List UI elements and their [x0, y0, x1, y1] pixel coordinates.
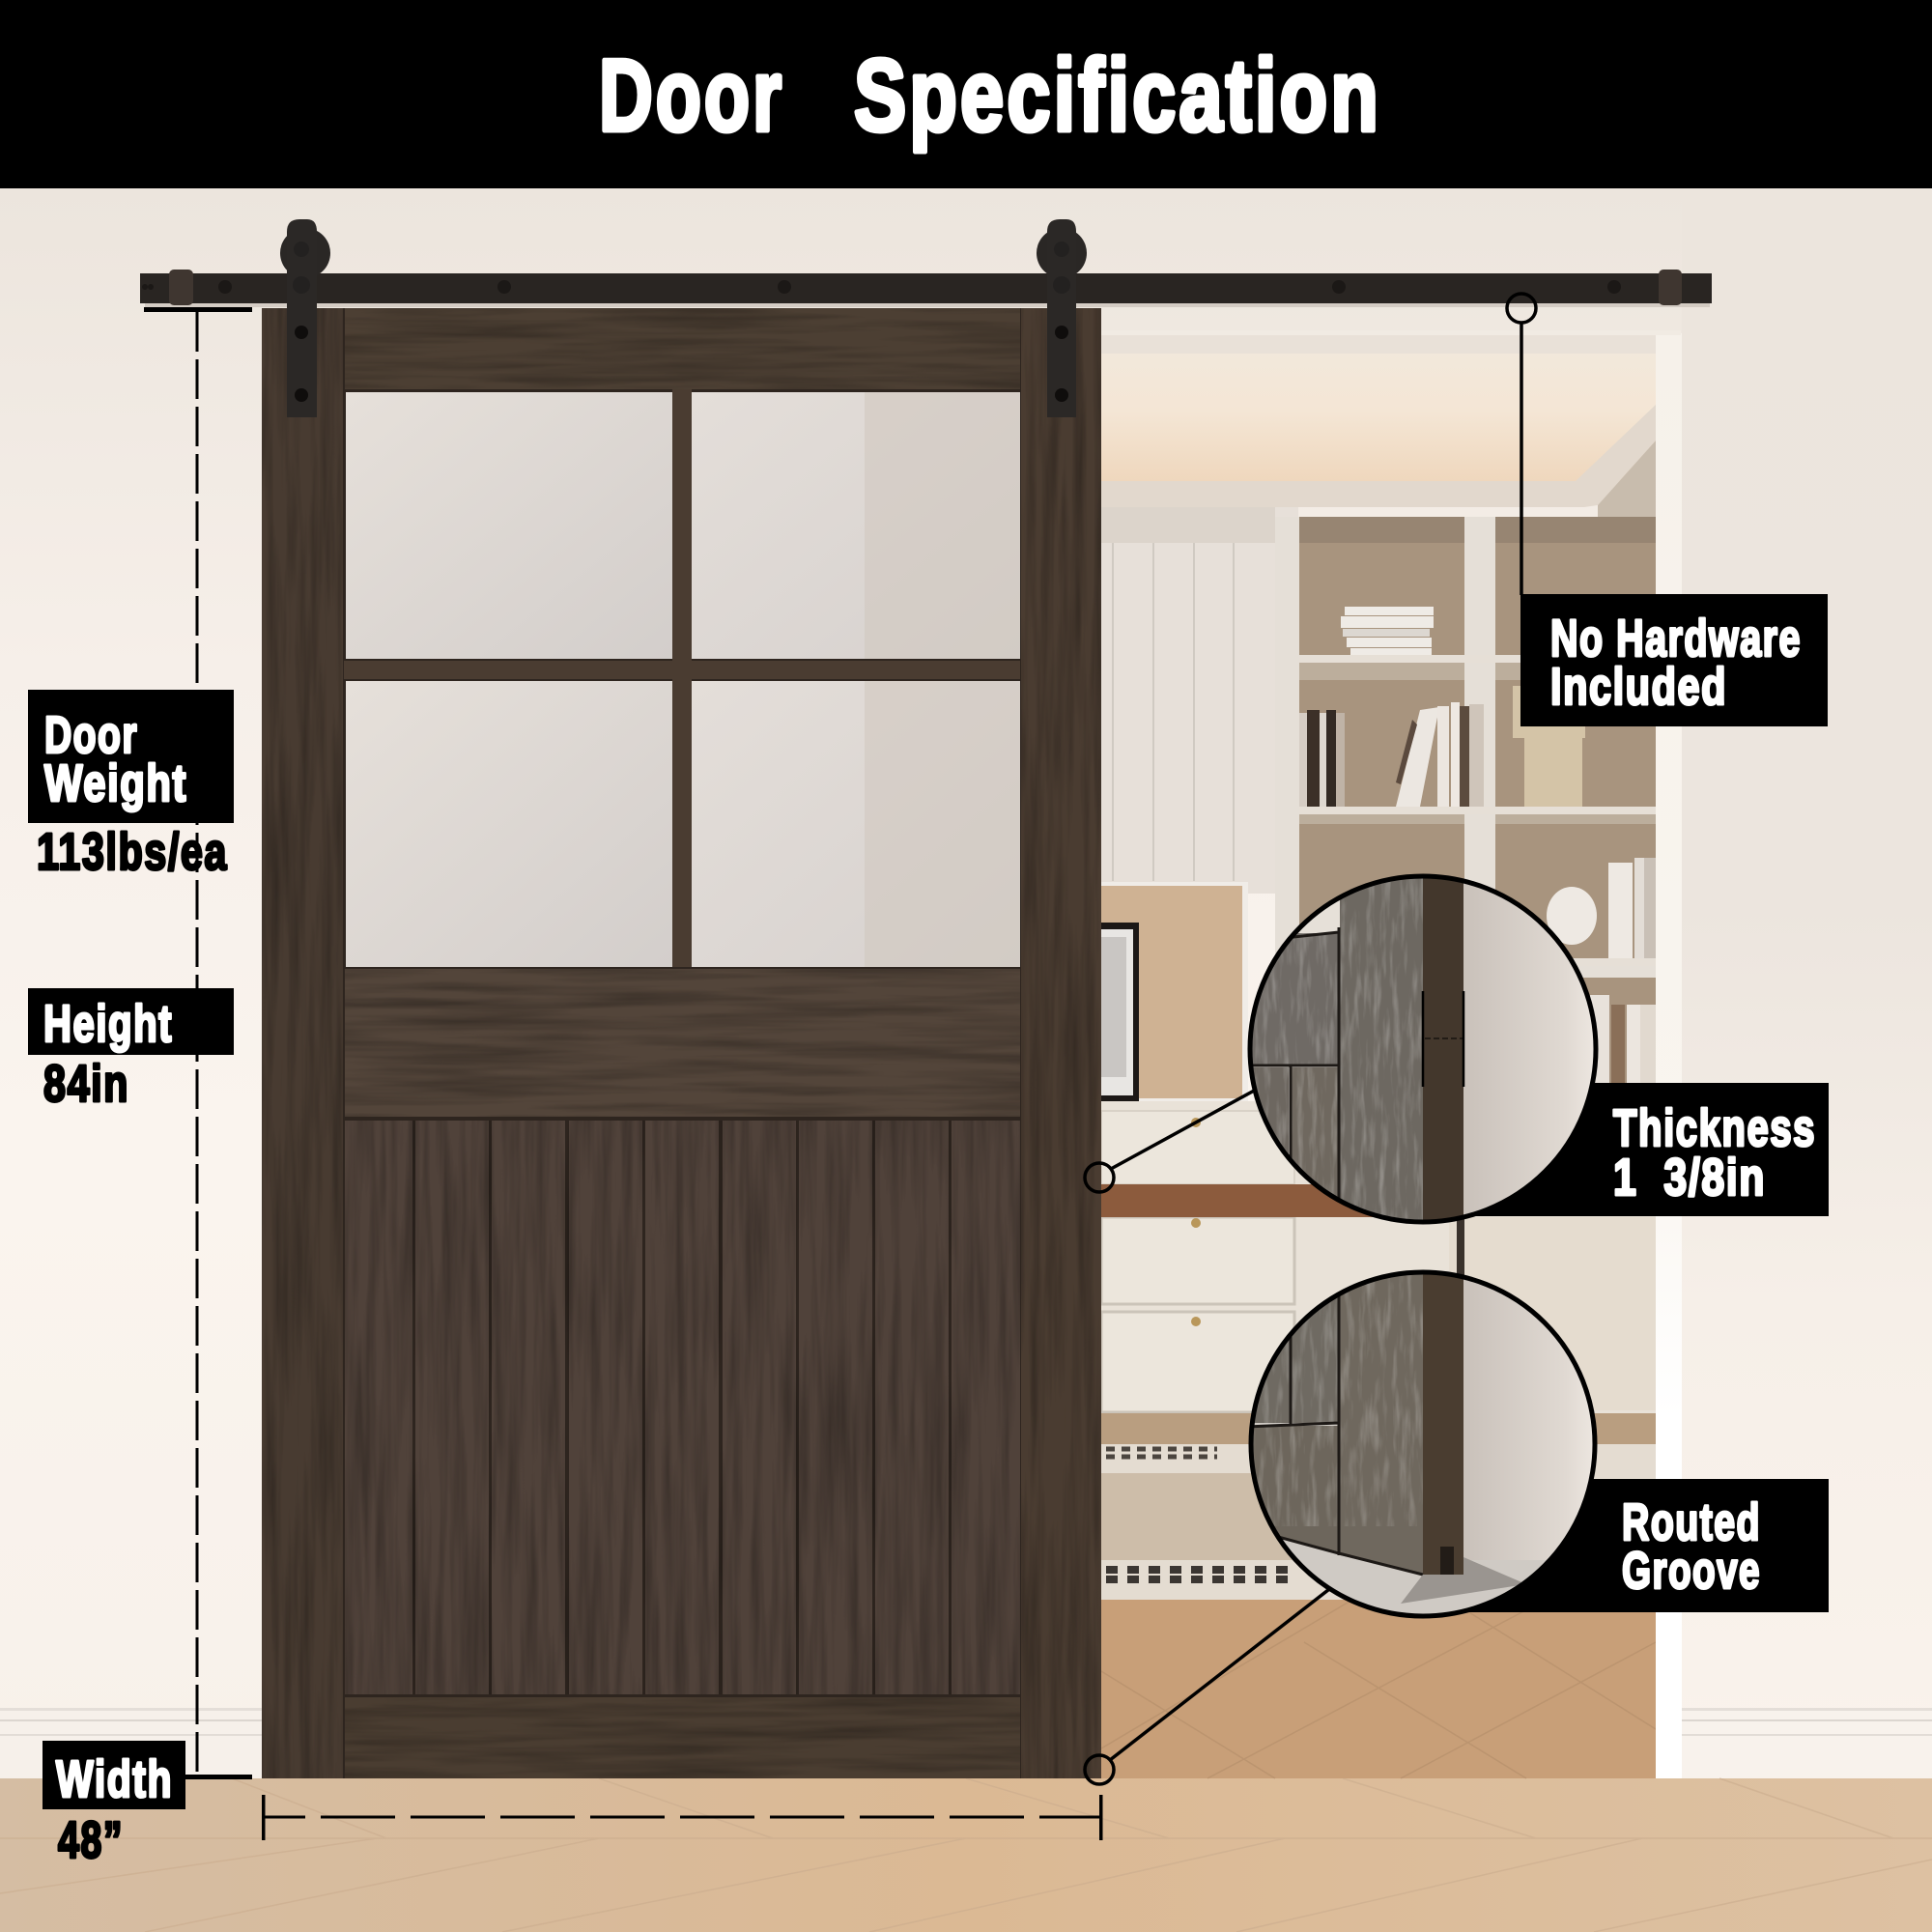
middle rail: [345, 969, 1020, 1117]
label: door weight: Weight: [44, 754, 187, 812]
vase and books on lower shelf: [1547, 858, 1656, 1169]
label: door weight: [28, 690, 234, 823]
sliding door: [262, 308, 1101, 1778]
panelled wall: [1101, 507, 1298, 894]
ceiling: [1101, 354, 1656, 481]
crown moulding: [1101, 404, 1657, 507]
label: no hardware included: No Hardware: [1550, 610, 1802, 668]
width dimension line: [262, 1795, 1103, 1840]
value: door weight: 113lbs/ea: [37, 823, 228, 881]
detail circle: thickness: [1246, 874, 1600, 1232]
glass pane bottom left: [346, 681, 672, 967]
rug: [1101, 1413, 1656, 1600]
title: [599, 39, 1381, 153]
top rail: [345, 308, 1020, 389]
callout line: routed groove: [1085, 1586, 1333, 1784]
shelf undersides: [1299, 517, 1656, 824]
soffit: [1101, 330, 1656, 354]
floor: [0, 1778, 1932, 1932]
label: no hardware included: Included: [1550, 658, 1727, 716]
glass pane top left: [346, 392, 672, 659]
label: width: [43, 1741, 185, 1809]
title: Door: [599, 39, 784, 153]
door base: [262, 308, 1101, 1778]
right hanger: [1037, 219, 1087, 417]
bookcase frame: [1275, 517, 1656, 1193]
door jamb: [1101, 330, 1682, 1778]
grain on stile: [1340, 874, 1423, 1227]
grain on door face: [1246, 1270, 1423, 1575]
label: door weight: Door: [44, 706, 138, 764]
art frame: [1101, 882, 1248, 1101]
barn door track: [140, 270, 1712, 307]
left stopper: [169, 270, 193, 305]
upright books left: [1299, 710, 1345, 807]
label: height: Height: [43, 995, 173, 1053]
right stopper: [1659, 270, 1682, 305]
label: thickness: [1449, 1083, 1829, 1216]
lamp on shelf: [1513, 686, 1585, 807]
label: no hardware included: [1520, 594, 1828, 726]
wood grain: [262, 308, 1101, 1778]
title: Specification: [854, 39, 1381, 153]
glass pane bottom right: [692, 681, 1020, 967]
label: width: Width: [56, 1750, 173, 1808]
glass pane top right: [692, 392, 1020, 659]
room floor: [1101, 1600, 1656, 1778]
label: routed groove: Groove: [1622, 1542, 1761, 1600]
callout line: thickness: [1085, 1090, 1256, 1192]
mullion horizontal: [344, 661, 1020, 679]
label: routed groove: [1449, 1479, 1829, 1612]
label: thickness: 1 3/8in: [1613, 1149, 1766, 1207]
book stack: [1341, 607, 1434, 655]
right skirting board: [1682, 1708, 1932, 1778]
upright books right: [1396, 702, 1484, 807]
shelf backs: [1299, 543, 1656, 1171]
back wall corner: [1598, 440, 1657, 522]
vertical planks: [345, 1121, 1020, 1694]
left skirting board: [0, 1708, 262, 1778]
grain on panels: [1254, 933, 1337, 1194]
right wall: [1682, 188, 1932, 1782]
rail bolts: [142, 280, 1621, 294]
detail circle: routed groove: [1246, 1270, 1600, 1620]
label: routed groove: Routed: [1622, 1493, 1761, 1551]
bottom rail: [345, 1697, 1020, 1778]
glass reflection: [865, 392, 1020, 967]
height dimension line: [144, 307, 252, 1779]
right stile: [1021, 308, 1101, 1778]
value: width: 48”: [58, 1811, 124, 1869]
title band: [0, 0, 1932, 188]
callout line: no hardware: [1507, 294, 1536, 595]
mullion vertical: [672, 389, 692, 967]
value: height: 84in: [43, 1055, 129, 1113]
label: thickness: Thickness: [1613, 1099, 1816, 1157]
left hanger: [280, 219, 330, 417]
room seen through opening: [1101, 330, 1657, 1778]
cabinet and drawers: [1101, 1101, 1656, 1420]
left stile: [262, 308, 343, 1778]
shelves: [1299, 655, 1656, 966]
rail shadow: [145, 301, 1710, 307]
